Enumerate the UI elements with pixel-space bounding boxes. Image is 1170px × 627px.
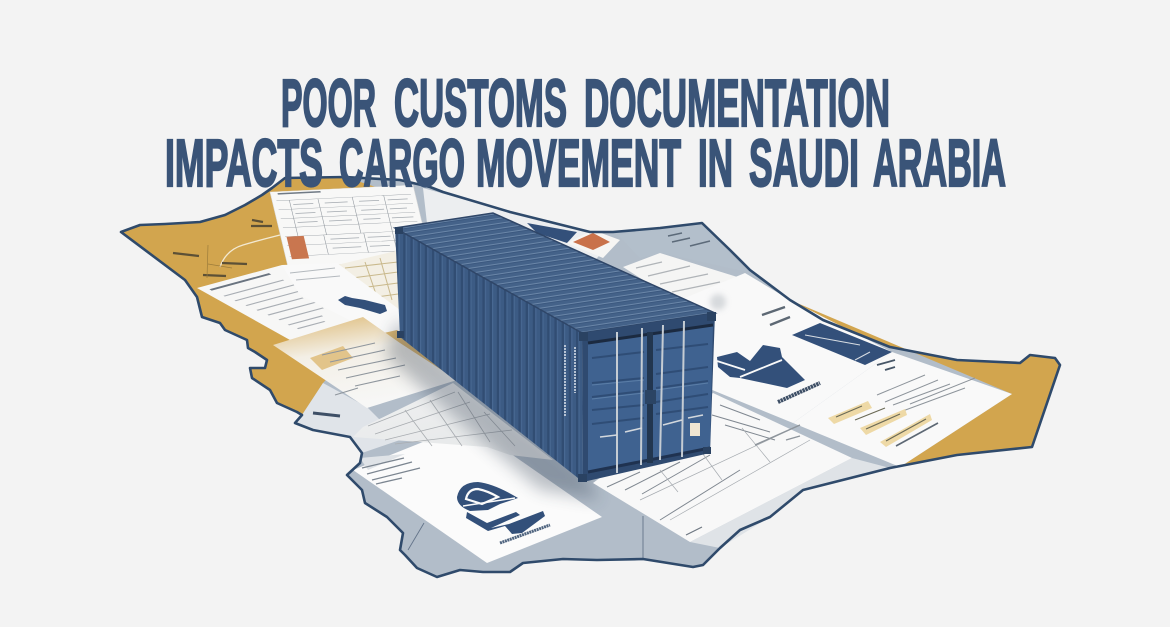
map of Saudi Arabia [121,177,1060,577]
title: IN [698,126,733,201]
map outline [121,177,1060,577]
document: sheet over gold [273,317,457,408]
title: MOVEMENT [476,126,681,201]
pale strip: south east [690,458,890,548]
document: sheet with ship icon [282,263,400,337]
door handles [600,415,703,437]
document: top navy and orange cards [527,223,620,258]
container door end [582,313,715,482]
title: DOCUMENTATION [584,66,890,141]
title: IMPACTS [165,126,323,201]
title: ARABIA [873,126,1006,201]
navy banner [792,323,892,365]
map labels and route [173,220,340,416]
locking bars [617,321,684,473]
container shadow [385,320,600,500]
document: north east form [623,233,747,310]
icon: ship logo [717,345,805,388]
logo caption [500,525,550,543]
shipping container [395,213,716,482]
title [165,66,1006,201]
document: faded table sheet [353,383,553,460]
corner castings [395,227,716,482]
logo caption [778,383,820,402]
gold region: west [121,177,400,415]
document: customs form top left [270,185,431,267]
container side [395,228,583,482]
document: lower right form [593,393,852,542]
pale strip: west south [295,383,400,453]
title: CARGO [339,126,465,201]
container side markings [565,345,575,417]
title: CUSTOMS [394,66,567,141]
door label [690,423,700,436]
icon: bell logo [457,482,545,534]
title: SAUDI [749,126,859,201]
map base fill [121,177,1060,577]
grid line and dashed boundary [408,516,643,559]
icon: ship [338,296,387,314]
document: left sheet [197,265,375,340]
document: bottom sheet with bell logo [353,424,602,563]
pale north area [423,188,613,300]
document: large sheet with ship logo [680,273,892,423]
highlighted fields [828,401,932,447]
document: form with highlighted fields [793,352,1012,467]
document: gold table sheet [337,250,400,312]
grey-blue panel: north east [618,223,747,272]
container roof [395,213,715,333]
gold region: east [797,303,1060,467]
title: POOR [281,66,376,141]
